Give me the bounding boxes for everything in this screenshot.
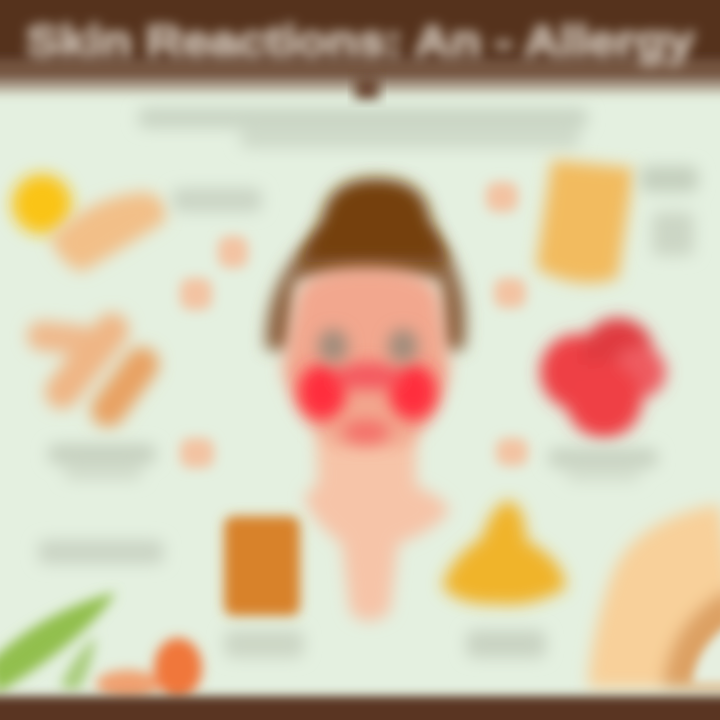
hair bun — [300, 178, 448, 262]
caption: top right — [640, 166, 698, 256]
icon: carrot pieces — [96, 638, 202, 698]
neck and shoulders — [304, 430, 450, 621]
icon: strawberries — [540, 318, 666, 438]
eyes — [318, 329, 418, 363]
footer band — [0, 696, 720, 720]
hair sides — [266, 230, 466, 350]
header tab — [355, 76, 379, 100]
header band — [0, 0, 720, 96]
caption: top left — [172, 188, 262, 212]
icon: peanuts — [42, 330, 142, 410]
icon: milk carton — [536, 160, 634, 283]
caption: strawberries — [548, 448, 658, 482]
figure: face with rash — [266, 178, 466, 621]
icon: wheat bread block — [224, 516, 300, 616]
icon: large bread loaf — [588, 504, 720, 688]
caption: bread block — [224, 630, 304, 658]
caption: lower left — [38, 540, 164, 564]
icon: green leaf — [0, 592, 116, 694]
subtitle — [138, 108, 588, 148]
small allergen dots — [180, 182, 528, 468]
rash: cheeks — [298, 362, 437, 444]
title: Skin Reactions: An - Allergy — [26, 17, 695, 66]
caption: peanuts — [48, 444, 156, 480]
icon: lemon and ginger slice — [12, 174, 166, 272]
face — [282, 268, 450, 446]
caption: cheese — [466, 630, 546, 658]
icon: cheese — [442, 500, 566, 605]
